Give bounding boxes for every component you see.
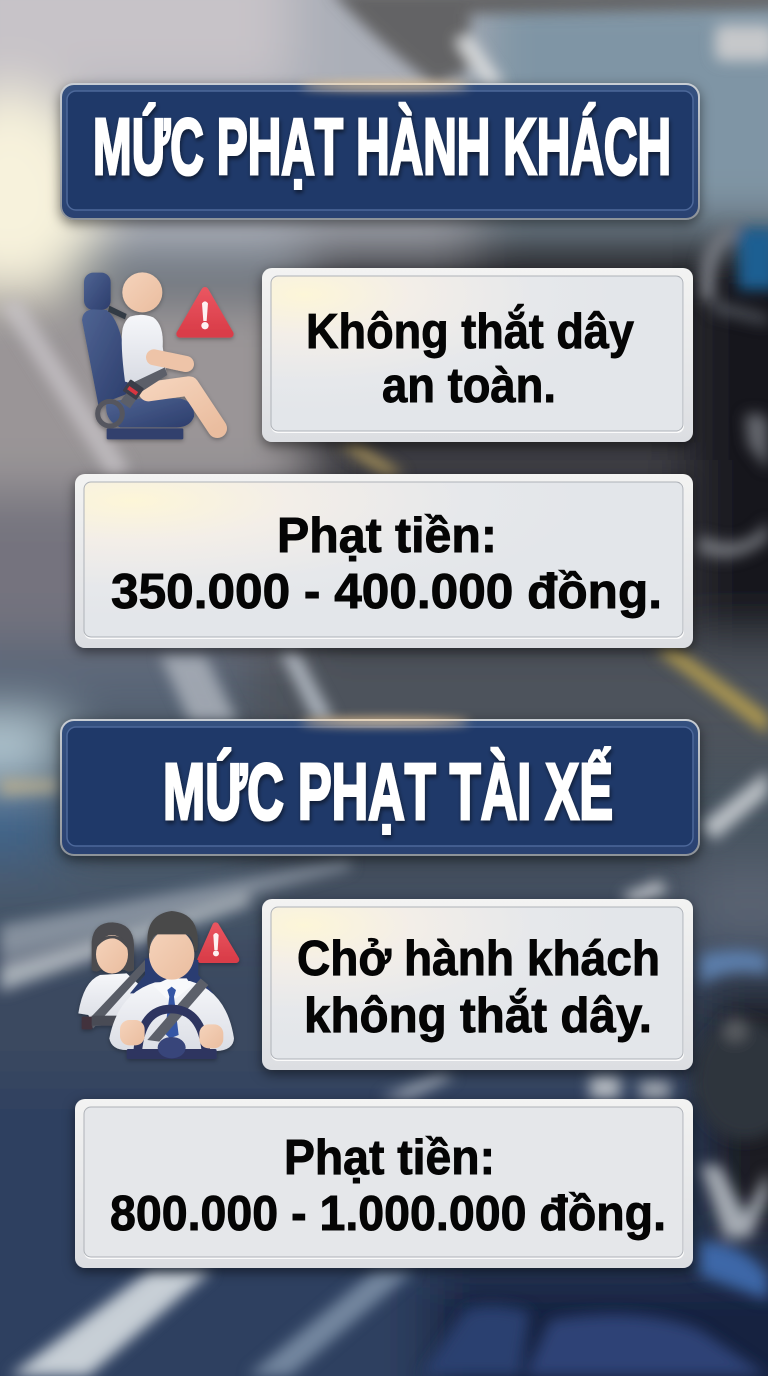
driver torso xyxy=(109,981,234,1058)
warning triangle xyxy=(201,926,236,960)
lap belt and buckle xyxy=(120,367,167,408)
card: passenger fine amount xyxy=(75,474,693,648)
tie and collar xyxy=(153,978,192,1038)
card: driver fine amount xyxy=(75,1099,693,1268)
card: violation driver xyxy=(262,899,693,1070)
heading banner: driver fines xyxy=(60,718,700,856)
icon: driver and passenger with warning xyxy=(78,911,236,1059)
text: fine 350.000 - 400.000: Phạt tiền: xyxy=(277,509,497,563)
icon: passenger wearing seat belt with warning xyxy=(82,272,230,439)
text: carrying unbelted passengers: không thắt dây. xyxy=(304,988,652,1043)
warning triangle xyxy=(180,291,230,334)
text: carrying unbelted passengers: Chở hành khách xyxy=(297,932,660,986)
shoulder belt xyxy=(147,978,208,1042)
person: leg xyxy=(148,386,217,428)
steering wheel xyxy=(127,1009,217,1059)
person: torso xyxy=(122,315,167,384)
person: arm xyxy=(154,357,186,364)
driver hands xyxy=(120,1020,223,1048)
seat backrest and cushion xyxy=(82,273,194,439)
passenger figure xyxy=(78,922,147,1029)
driver seat xyxy=(130,958,213,993)
shoulder strap xyxy=(108,306,127,319)
heading banner: passenger fines xyxy=(60,82,700,220)
text: no seat belt: Không thắt dây xyxy=(306,304,634,359)
card: violation passenger xyxy=(262,268,693,442)
person: head xyxy=(122,272,162,312)
text: fine 800.000 - 1.000.000: 800.000 - 1.000.000 đồng. xyxy=(110,1187,666,1241)
driver head xyxy=(147,911,198,980)
belt retractor ring xyxy=(98,401,122,426)
text: fine 800.000 - 1.000.000: Phạt tiền: xyxy=(284,1131,495,1185)
text: no seat belt: an toàn. xyxy=(382,359,556,413)
text: fine 350.000 - 400.000: 350.000 - 400.000 đồng. xyxy=(111,565,662,619)
